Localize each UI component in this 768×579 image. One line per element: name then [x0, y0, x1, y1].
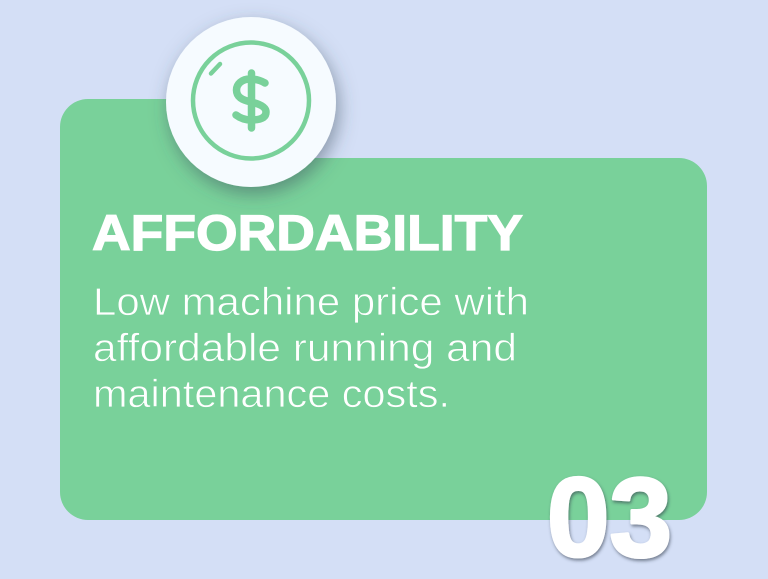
icon: dollar coin: [166, 17, 336, 187]
body text: affordable running and: [93, 327, 517, 370]
heading: AFFORDABILITY: [92, 205, 523, 261]
body text: [93, 281, 529, 416]
body text: maintenance costs.: [93, 373, 450, 416]
number 03: 03: [547, 455, 672, 579]
panel: green card: [60, 99, 707, 520]
body text: Low machine price with: [93, 281, 529, 324]
